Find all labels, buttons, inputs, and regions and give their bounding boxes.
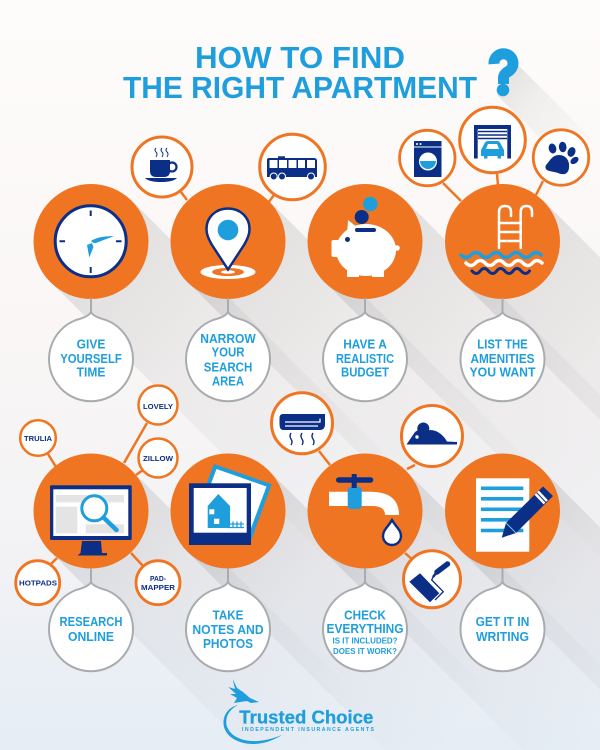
bubble: zillow: [138, 438, 178, 478]
label bubble: NOTES AND: [192, 623, 264, 637]
title: HOW TO FIND: [195, 40, 405, 75]
label bubble: [49, 568, 133, 671]
bubble: air conditioner: [272, 393, 332, 454]
orange circle: [170, 454, 286, 568]
step: list the amenities: [400, 107, 589, 401]
label bubble: YOU WANT: [470, 366, 536, 380]
label bubble: [186, 568, 270, 671]
bubble: washer: [400, 130, 455, 186]
bubble: paint roller: [404, 551, 460, 608]
bubble: paw: [533, 130, 589, 185]
label bubble: HAVE A: [343, 338, 387, 352]
icon: question mark: [494, 54, 513, 96]
tagline: INDEPENDENT INSURANCE AGENTS: [242, 727, 375, 733]
label bubble: NARROW: [200, 332, 256, 346]
label bubble: DOES IT WORK?: [333, 647, 397, 656]
label bubble: [460, 568, 544, 671]
label bubble: RESEARCH: [60, 615, 122, 629]
label bubble: [460, 298, 544, 401]
title: THE RIGHT APARTMENT: [123, 70, 477, 105]
step: check everything: [272, 393, 462, 671]
bubble: lovely: LOVELY: [143, 402, 173, 411]
step: have a realistic budget: [308, 184, 422, 401]
icon: monitor with magnifier: [50, 485, 132, 556]
icon: piggy bank: [332, 197, 400, 277]
step: get it in writing: [445, 454, 560, 671]
orange circle: [34, 184, 148, 299]
label bubble: TIME: [77, 366, 105, 380]
label bubble: GET IT IN: [476, 615, 529, 629]
icon: faucet: [329, 474, 401, 545]
label bubble: GIVE: [77, 338, 105, 352]
bubble: trulia: TRULIA: [24, 434, 53, 443]
label bubble: [49, 298, 133, 401]
label bubble: AMENITIES: [470, 352, 534, 366]
icon: photos: [189, 464, 272, 545]
label bubble: YOURSELF: [60, 352, 122, 366]
bubble: lovely: [138, 386, 178, 424]
label bubble: WRITING: [476, 630, 529, 644]
label bubble: [323, 568, 407, 671]
step: give yourself time: [34, 184, 148, 401]
icon: paper and pen: [476, 478, 553, 552]
bubble: padmapper: [136, 561, 180, 605]
icon: pool: [461, 206, 542, 274]
icon: map pin: [200, 208, 256, 279]
orange circle: [308, 184, 422, 299]
orange circle: [445, 454, 560, 568]
orange circle: [34, 454, 148, 568]
bubble: hotpads: HOTPADS: [19, 578, 57, 588]
step: narrow your search area: [132, 134, 325, 401]
icon: eagle: [228, 679, 259, 703]
label bubble: YOUR: [212, 346, 244, 360]
bubble: padmapper: PAD-: [150, 574, 166, 583]
label bubble: SEARCH: [204, 360, 252, 374]
bubble: garage: [460, 107, 525, 173]
bubble: bus: [260, 134, 325, 200]
bubble: mouse: [402, 406, 462, 466]
step: research online: [16, 386, 180, 671]
icon: clock: [55, 206, 126, 277]
connectors: [48, 174, 543, 566]
orange circle: [445, 184, 560, 299]
orange circle: [308, 454, 422, 568]
title: [123, 40, 477, 105]
label bubble: REALISTIC: [336, 352, 394, 366]
logo: Trusted Choice: [224, 679, 375, 744]
swoosh: [224, 705, 282, 744]
bubble: coffee: [132, 137, 192, 197]
label bubble: LIST THE: [477, 338, 528, 352]
bubble: padmapper: MAPPER: [141, 583, 176, 592]
label bubble: [186, 298, 270, 401]
label bubble: AREA: [212, 374, 244, 388]
orange circle: [170, 184, 286, 299]
label bubble: EVERYTHING: [326, 622, 404, 636]
label bubble: ONLINE: [68, 630, 114, 644]
label bubble: PHOTOS: [203, 637, 253, 651]
label bubble: [323, 298, 407, 401]
wordmark: Trusted Choice: [239, 706, 373, 727]
bubble: trulia: [20, 420, 56, 456]
label bubble: TAKE: [213, 608, 243, 622]
label bubble: BUDGET: [341, 366, 389, 380]
label bubble: CHECK: [344, 608, 386, 622]
label bubble: IS IT INCLUDED?: [332, 637, 398, 646]
bubble: zillow: ZILLOW: [143, 454, 174, 463]
step: take notes and photos: [170, 454, 286, 671]
bubble: hotpads: [16, 561, 60, 605]
